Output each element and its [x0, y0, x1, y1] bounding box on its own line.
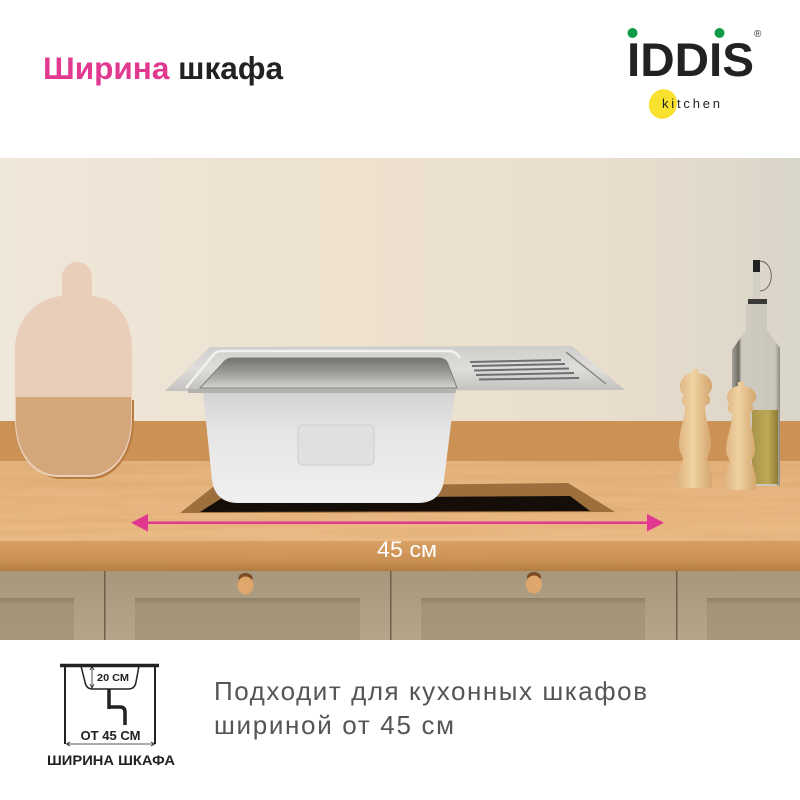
description text — [214, 676, 647, 740]
logo wordmark: IDDIS — [627, 33, 754, 86]
description text: шириной от 45 см — [214, 710, 454, 740]
caption: ШИРИНА ШКАФА — [47, 752, 175, 768]
width label: 45 см — [377, 537, 437, 562]
width label: ОТ 45 СМ — [80, 729, 140, 743]
label patch — [298, 425, 374, 465]
title: Ширина шкафа — [43, 50, 283, 86]
knob left — [238, 573, 254, 594]
yellow blob — [644, 84, 682, 124]
countertop front edge — [0, 541, 800, 571]
cabinet diagram icon — [47, 666, 175, 768]
kitchen photo scene — [0, 158, 800, 648]
cabinet doors — [0, 571, 800, 640]
countertop — [0, 461, 800, 541]
drain channel — [566, 352, 606, 384]
rim highlight — [186, 351, 460, 388]
basin — [200, 358, 457, 388]
sink body — [203, 392, 455, 503]
wood grain — [16, 482, 800, 540]
description text: Подходит для кухонных шкафов — [214, 676, 647, 706]
sink outline — [81, 666, 139, 689]
width arrow — [131, 514, 664, 532]
registered mark: ® — [754, 29, 762, 40]
width arrow — [66, 742, 154, 746]
bottle — [732, 260, 780, 486]
pepper mill large — [677, 369, 712, 488]
logo dots — [628, 28, 724, 38]
backsplash wood — [0, 421, 800, 461]
worktop — [60, 664, 159, 667]
logo: IDDIS kitchen — [627, 28, 762, 124]
cabinet walls — [65, 667, 155, 744]
drainboard grooves — [470, 360, 579, 380]
wall — [0, 158, 800, 422]
depth arrow — [90, 666, 94, 688]
trap pipe — [109, 689, 125, 725]
sink rim — [165, 346, 625, 391]
sink — [165, 346, 625, 503]
cutting board — [15, 262, 134, 479]
kitchen word: kitchen — [662, 96, 720, 111]
depth label: 20 СМ — [97, 672, 129, 684]
cutout in countertop — [180, 483, 615, 513]
pepper mill small — [724, 382, 756, 490]
knob right — [526, 572, 542, 594]
